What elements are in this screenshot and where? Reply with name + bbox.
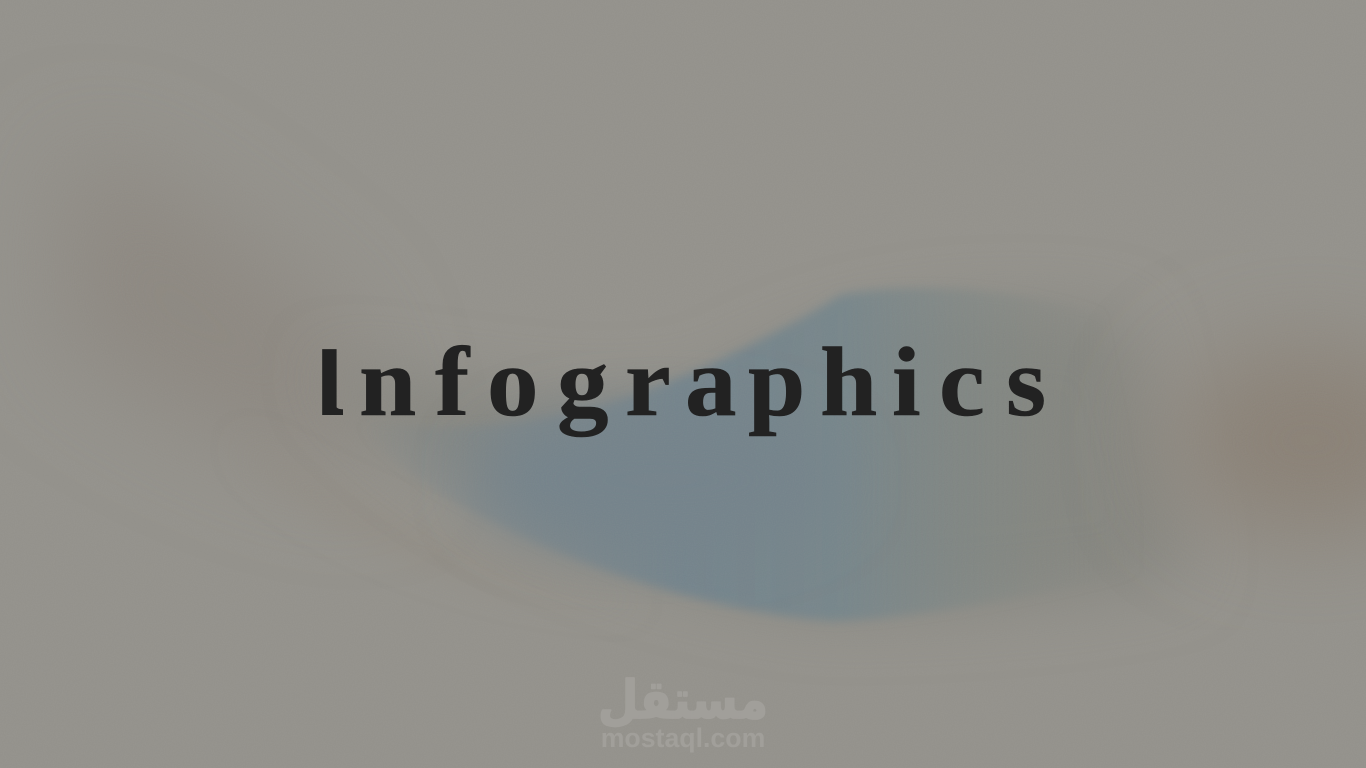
watermark latin wordmark: mostaql.com <box>601 723 765 753</box>
gradient wave: blue body <box>350 288 1150 621</box>
watermark <box>598 669 768 753</box>
title <box>316 327 1046 437</box>
title letter foot <box>335 401 343 415</box>
title remaining letters: nfographics <box>359 327 1046 437</box>
gradient wave: warm left band <box>60 150 390 480</box>
watermark arabic logotype: مستقل <box>598 669 768 731</box>
title: I <box>316 328 343 436</box>
gradient wave: grey shadow <box>320 310 1190 610</box>
gradient wave: warm right glow <box>1170 345 1366 535</box>
gradient wave: lower warm edge <box>240 440 640 605</box>
gradient wave: blue core <box>480 415 840 545</box>
